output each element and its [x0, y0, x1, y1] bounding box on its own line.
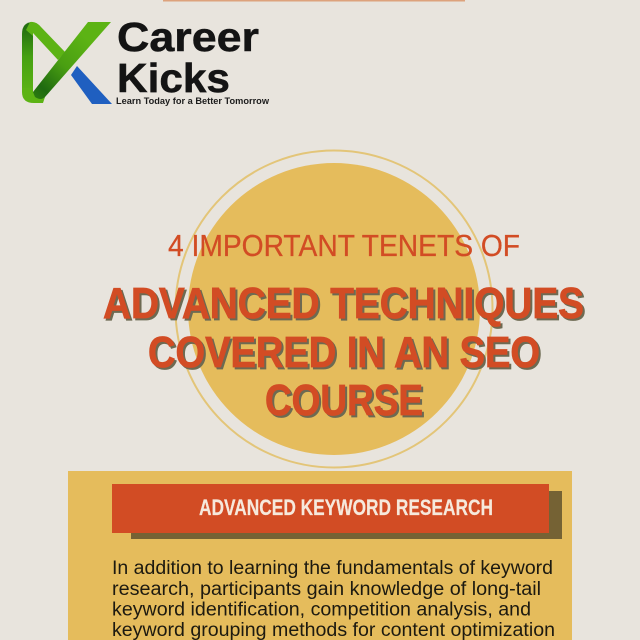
title: COVERED IN AN SEO	[150, 330, 542, 379]
title: COVERED IN AN SEO	[148, 328, 540, 377]
panel body text	[112, 558, 555, 640]
title: ADVANCED TECHNIQUES	[103, 279, 584, 328]
panel body text: research, participants gain knowledge of long-tail	[112, 579, 541, 600]
decorative circle behind title	[176, 150, 492, 468]
logo tagline: Learn Today for a Better Tomorrow	[116, 96, 270, 106]
title: COURSE	[267, 378, 425, 427]
icon: logo mark	[22, 22, 112, 104]
panel body text: In addition to learning the fundamentals of keyword	[112, 558, 553, 579]
panel body text: keyword identification, competition analysis, and	[112, 600, 531, 620]
panel heading: ADVANCED KEYWORD RESEARCH	[199, 495, 493, 520]
logo wordmark	[117, 14, 259, 101]
panel: advanced keyword research	[68, 471, 572, 640]
logo wordmark: Career	[117, 14, 259, 60]
logo wordmark: Kicks	[117, 55, 230, 101]
title: COURSE	[265, 376, 423, 425]
title: ADVANCED TECHNIQUES	[105, 281, 586, 330]
title	[103, 279, 586, 427]
logo: Career Kicks	[22, 14, 270, 106]
panel header banner	[112, 484, 562, 539]
subtitle: 4 IMPORTANT TENETS OF	[168, 228, 520, 263]
